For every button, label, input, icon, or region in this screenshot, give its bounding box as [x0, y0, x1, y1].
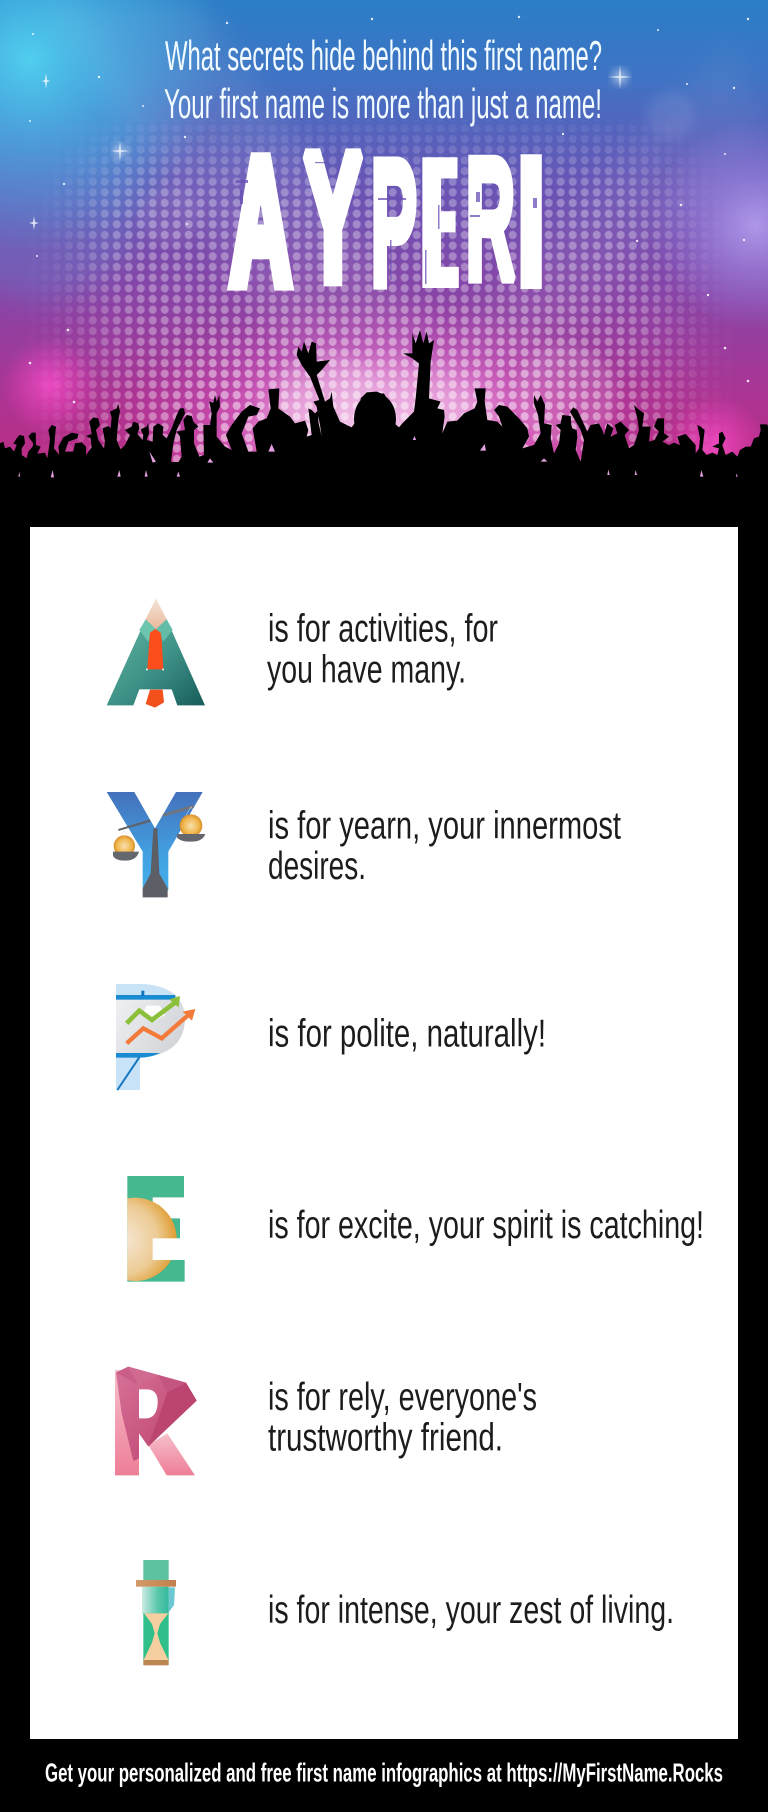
text: A line [267, 608, 498, 692]
icon: letter R with gem [115, 1367, 197, 1475]
row Y [107, 792, 621, 897]
text: Y line: is for yearn, your innermost [268, 805, 621, 848]
icon: letter Y with scales [107, 792, 205, 897]
icon: letter E with moon [127, 1176, 185, 1282]
header background: stage lights [0, 0, 768, 462]
title: distressed name: P [370, 122, 417, 323]
panel: white content card [30, 527, 738, 1739]
title: distressed name: Y [304, 117, 362, 320]
title: distressed name: E [418, 117, 461, 329]
row R [115, 1367, 537, 1475]
row P [116, 984, 546, 1090]
row A [107, 598, 498, 708]
icon: letter A with shirt and tie [107, 598, 205, 708]
header text: tagline [164, 32, 602, 127]
text: P line: is for polite, naturally! [268, 1013, 546, 1056]
title: distressed name: I [512, 113, 550, 329]
icon: letter P with chart board [116, 984, 195, 1090]
title: distressed name: A [230, 121, 291, 321]
icon: letter I with hourglass [136, 1560, 176, 1665]
row E [93, 1176, 704, 1282]
text: Y line [268, 805, 621, 888]
text: A line: is for activities, for [268, 608, 498, 651]
text: Y line: desires. [268, 845, 366, 888]
text: A line: you have many. [267, 649, 466, 692]
row I [136, 1560, 674, 1665]
text: R line [268, 1376, 537, 1460]
title: distressed name: R [466, 123, 515, 317]
crowd silhouette [0, 330, 768, 528]
text: R line: is for rely, everyone's [268, 1376, 537, 1419]
title: distressed name [230, 113, 550, 329]
text: R line: trustworthy friend. [268, 1417, 503, 1460]
